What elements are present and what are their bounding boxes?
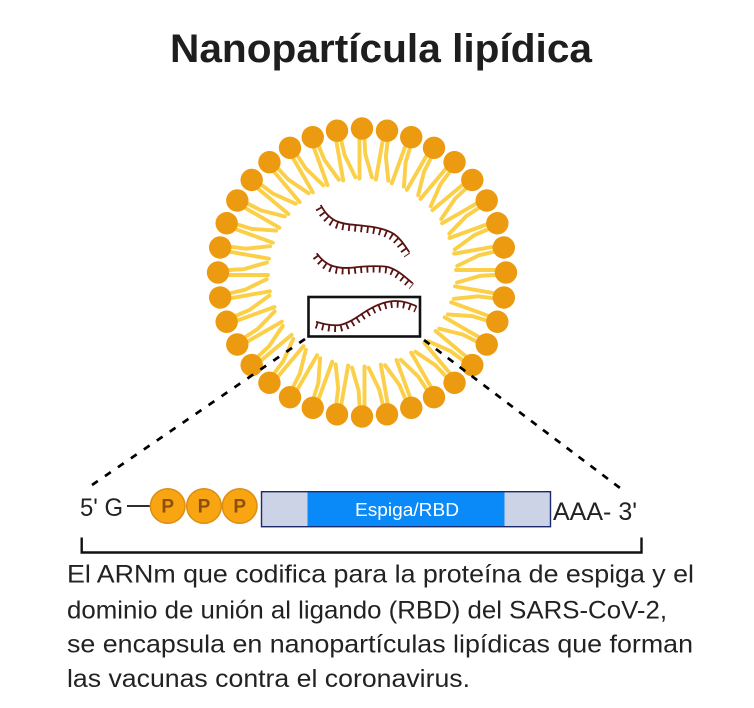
mRNA coding bar [262,492,550,527]
description text: las vacunas contra el coronavirus. [67,665,470,693]
description text: dominio de unión al ligando (RBD) del SARS-CoV-2, [67,596,667,624]
5 prime label: 5' G [80,494,123,522]
dashed zoom line left [92,339,305,485]
phosphate group 2: P [198,497,211,518]
lipid nanoparticle shell [207,117,517,428]
phosphate group 2 [187,489,221,523]
phosphate group 1: P [161,497,174,518]
phosphate group 1 [150,489,185,523]
description text: El ARNm que codifica para la proteína de espiga y el [67,560,694,588]
connector line [127,505,151,507]
3 prime label: AAA- 3' [553,498,637,526]
mRNA strand 2 [316,253,413,286]
mRNA strand 1 [319,205,409,255]
phosphate group 3: P [233,497,246,518]
title: Nanopartícula lipídica [170,27,593,71]
mRNA coding bar: Espiga/RBD [355,500,459,520]
description text: se encapsula en nanopartículas lipídicas que forman [67,630,693,658]
selection box [308,297,420,336]
description text [67,560,694,693]
dashed zoom line right [424,340,620,488]
phosphate group 3 [222,489,257,523]
mRNA strand 3 in selection box [316,301,416,328]
bracket [82,538,641,552]
